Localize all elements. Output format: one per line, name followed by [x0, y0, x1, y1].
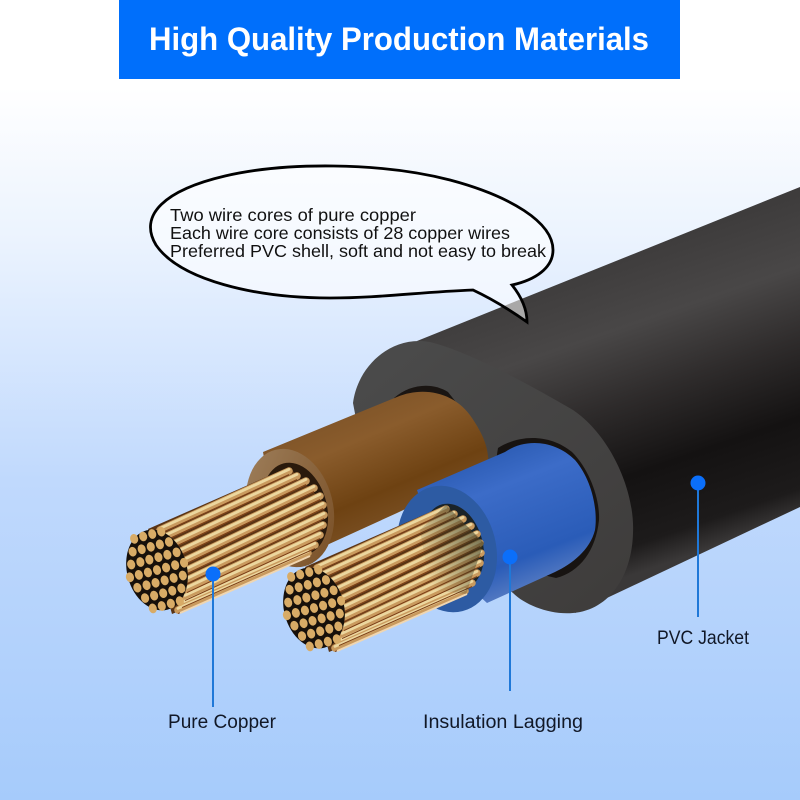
label: PVC jacket: PVC Jacket — [657, 628, 750, 649]
blue insulated core — [384, 438, 599, 623]
speech bubble callout — [150, 166, 553, 322]
copper wire strands, blue core — [272, 505, 484, 656]
callout pointer: PVC jacket — [690, 476, 706, 617]
label: insulation lagging: Insulation Lagging — [423, 712, 583, 733]
copper wire strands, brown core — [115, 467, 326, 618]
callout pointer: pure copper — [206, 566, 220, 707]
brown insulated core — [234, 386, 488, 577]
PVC jacket cable body — [353, 187, 800, 613]
title banner — [119, 0, 680, 79]
callout text: Each wire core consists of 28 copper wires — [170, 223, 510, 243]
callout text: Preferred PVC shell, soft and not easy to break — [170, 241, 546, 261]
title banner: High Quality Production Materials — [149, 21, 649, 57]
label: pure copper: Pure Copper — [168, 712, 277, 733]
callout pointer: insulation lagging — [502, 550, 518, 691]
callout text: Two wire cores of pure copper — [170, 205, 416, 225]
